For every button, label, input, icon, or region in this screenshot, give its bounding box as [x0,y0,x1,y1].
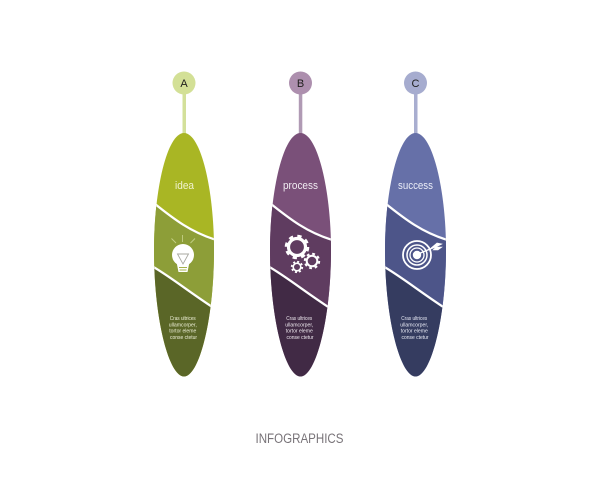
body text B: tortor eleme [286,329,313,335]
heading: process: process [283,180,318,192]
body text C: conse ctetur [402,335,429,341]
body text A: Cras ultrices [170,316,196,322]
badge A: A [180,78,188,90]
body text A: tortor eleme [169,329,196,335]
body text B: ullamcorper, [285,322,313,328]
badge B: B [297,78,304,90]
column C: success [385,72,446,376]
leaf A segments [154,133,214,376]
heading: idea: idea [175,180,195,192]
badge B [289,72,312,135]
heading: success: success [398,180,433,192]
title: INFOGRAPHICS [256,431,344,446]
body text A: conse ctetur [170,335,197,341]
icon: gears [286,236,319,272]
icon: target with arrow [403,241,442,269]
column A: idea [154,72,214,376]
body text C: tortor eleme [401,329,428,335]
column B: process [270,72,331,376]
badge C [404,72,427,135]
infographic canvas [154,72,446,443]
body text C: ullamcorper, [400,322,428,328]
body text C: Cras ultrices [401,316,428,322]
badge A [172,72,196,135]
body text B: conse ctetur [286,335,314,341]
leaf C segments [385,133,446,376]
body text A: ullamcorper, [169,322,197,328]
icon: light bulb [172,235,195,272]
body text B: Cras ultrices [286,316,313,322]
leaf B segments [270,133,331,376]
badge C: C [412,78,420,90]
